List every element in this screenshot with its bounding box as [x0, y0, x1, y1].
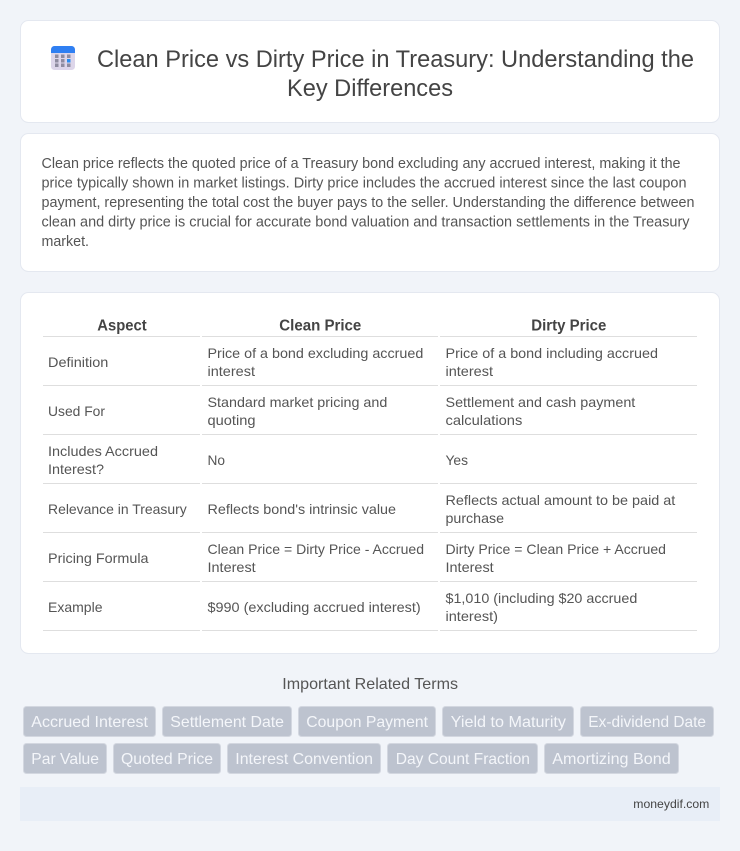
- panel: comparison table: [20, 292, 720, 654]
- table header: Aspect: [97, 318, 147, 335]
- table header: [97, 318, 606, 335]
- row: used for: quoting: [208, 412, 256, 428]
- related terms chips: Ex-dividend Date: [588, 714, 706, 731]
- row: definition: interest: [446, 363, 493, 379]
- row: used for: [48, 394, 635, 428]
- related terms chips: Par Value: [31, 751, 99, 768]
- related terms chips: Settlement Date: [170, 714, 284, 731]
- row: definition: [48, 345, 658, 379]
- row: includes accrued interest: Yes: [446, 452, 468, 468]
- row: definition: Price of a bond including accrued: [446, 345, 658, 361]
- text block: introduction: [42, 156, 694, 250]
- row: includes accrued interest: [48, 443, 468, 477]
- related terms chips: Accrued Interest: [31, 714, 149, 731]
- text block: introduction: clean and dirty price is crucial for accurate bond valuation and transaction settlements in the Treasury: [42, 214, 690, 230]
- panel: title card: [20, 20, 720, 122]
- row: relevance in treasury: purchase: [446, 510, 504, 526]
- row: example: $990 (excluding accrued interest): [208, 599, 421, 615]
- table header: Dirty Price: [531, 318, 606, 335]
- row: used for: calculations: [446, 412, 522, 428]
- text block: introduction: Clean price reflects the quoted price of a Treasury bond excluding any accrued interest, making it the: [42, 156, 680, 172]
- related terms chips: Interest Convention: [235, 751, 373, 768]
- icon: calendar: [51, 46, 75, 70]
- row: pricing formula: Clean Price = Dirty Price - Accrued: [208, 541, 424, 557]
- footer: [20, 787, 720, 821]
- text block: introduction: payment, representing the total cost the buyer pays to the seller. Understanding the difference between: [42, 195, 694, 211]
- row: includes accrued interest: No: [208, 452, 225, 468]
- row: example: [48, 590, 637, 624]
- heading: important related terms: Important Related Terms: [282, 676, 458, 693]
- related terms chips: Amortizing Bond: [552, 751, 671, 768]
- row: pricing formula: [48, 541, 666, 575]
- row: includes accrued interest: Interest?: [48, 461, 104, 477]
- related terms chips: Quoted Price: [121, 751, 213, 768]
- related terms chips: Day Count Fraction: [396, 751, 530, 768]
- row: definition: interest: [208, 363, 255, 379]
- row: pricing formula: Interest: [446, 559, 494, 575]
- row: used for: Used For: [48, 403, 105, 419]
- footer source text: moneydif.com: [633, 797, 709, 811]
- title: Key Differences: [287, 75, 453, 102]
- row: definition: Price of a bond excluding accrued: [208, 345, 423, 361]
- related terms chips: [24, 706, 714, 774]
- row: used for: Standard market pricing and: [208, 394, 387, 410]
- row: relevance in treasury: Reflects bond's intrinsic value: [208, 501, 396, 517]
- row: relevance in treasury: Reflects actual amount to be paid at: [446, 492, 675, 508]
- row: definition: Definition: [48, 354, 108, 370]
- panel: introduction: [20, 134, 720, 272]
- row: example: Example: [48, 599, 103, 615]
- title: Clean Price vs Dirty Price in Treasury: Understanding the: [97, 46, 694, 73]
- row: relevance in treasury: Relevance in Treasury: [48, 501, 187, 517]
- title: [97, 46, 694, 102]
- text block: introduction: market.: [42, 234, 89, 250]
- text block: introduction: price typically shown in market listings. Dirty price includes the accrued interest since the last coupon: [42, 176, 686, 192]
- row: relevance in treasury: [48, 492, 675, 526]
- row: includes accrued interest: Includes Accrued: [48, 443, 158, 459]
- row: example: interest): [446, 608, 498, 624]
- row: example: $1,010 (including $20 accrued: [446, 590, 637, 606]
- row: used for: Settlement and cash payment: [446, 394, 635, 410]
- related terms chips: Yield to Maturity: [451, 714, 566, 731]
- related terms chips: Coupon Payment: [306, 714, 429, 731]
- table header: Clean Price: [279, 318, 361, 335]
- row: pricing formula: Pricing Formula: [48, 550, 149, 566]
- row: pricing formula: Interest: [208, 559, 256, 575]
- row: pricing formula: Dirty Price = Clean Price + Accrued: [446, 541, 666, 557]
